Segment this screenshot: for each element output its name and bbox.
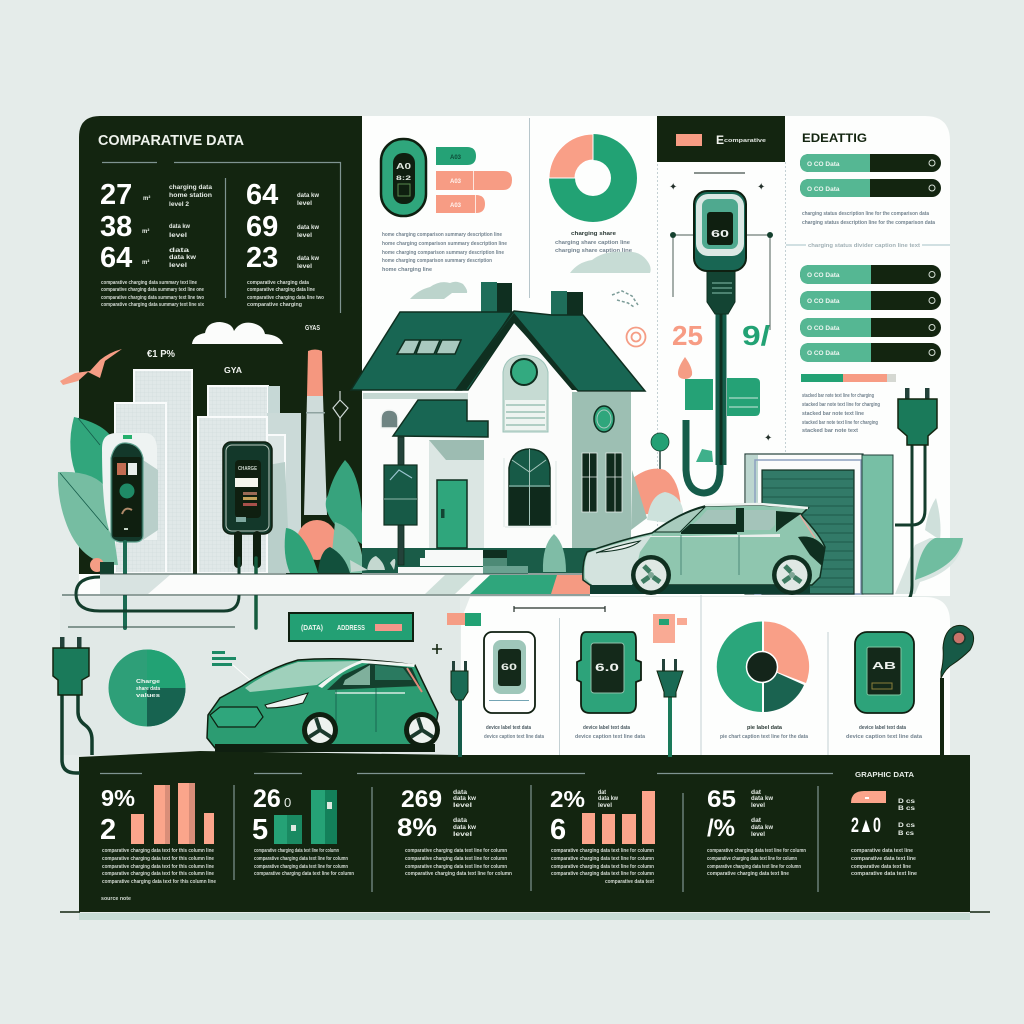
- illustration: salmon bush behind car: [631, 469, 683, 530]
- column 6: graphic stats: comparative data text line: [851, 871, 917, 877]
- stat column: right: data kw: [297, 256, 319, 262]
- text block: stacked bar notes: stacked bar note text line for charging: [802, 402, 880, 408]
- house walls: [362, 322, 631, 548]
- column 5: stats: comparative charging data text line for column: [707, 848, 806, 854]
- icon: scattered dots: [612, 291, 638, 307]
- panel: editing status bars: [786, 133, 950, 434]
- column 1: stats and bars: comparative charging data text for this column line: [102, 856, 214, 862]
- heading: status bars: EDEATTIG: [802, 133, 867, 145]
- cloud: above house: [410, 282, 467, 299]
- column 3: stats: data kw: [453, 825, 476, 831]
- column 1: stats and bars: comparative charging data text for this column line: [102, 879, 216, 885]
- stat column: left: data kw: [169, 224, 190, 230]
- column 2: stats and bars: [252, 785, 354, 877]
- text block: pill description: charging status description line for the comparison data: [802, 220, 935, 226]
- column 4: stats and bars: level: [598, 803, 612, 809]
- icon: salmon target: [626, 328, 646, 346]
- bar chart: green blocks: [274, 790, 337, 844]
- stat column: left: comparative charging data summary text line: [101, 280, 197, 286]
- wall lamp: [381, 410, 398, 428]
- labels above skyline: GYA: [224, 366, 242, 375]
- porch post: [398, 437, 404, 565]
- car: green hatchback: [207, 659, 440, 752]
- plug and cable: between cards: [657, 659, 683, 757]
- column 6: graphic stats: comparative data text line: [851, 848, 913, 854]
- donut chart: [549, 134, 637, 222]
- plug and cable: right: [828, 388, 937, 612]
- column 4: stats and bars: comparative data text: [605, 879, 654, 885]
- illustration: leaves left: [58, 417, 118, 574]
- column 1: stats and bars: source note: [101, 896, 131, 902]
- decorative stars: ✦: [669, 182, 677, 193]
- column 5: stats: [707, 786, 806, 877]
- text block: card 3: [846, 725, 922, 740]
- pill bar group bottom: O CO Data: [807, 350, 840, 357]
- bar chart: salmon 1: [131, 783, 214, 844]
- column 6: graphic stats: [851, 772, 917, 877]
- text block: description: home charging comparison summary description: [382, 258, 492, 264]
- icon: diamond pin: [333, 391, 348, 441]
- column 6: graphic stats: B cs: [898, 831, 915, 837]
- column 4: stats and bars: [550, 786, 655, 885]
- text block: card 2: device caption text line data: [575, 734, 645, 740]
- pill bar group top: O CO Data: [807, 161, 840, 168]
- column 5: stats: comparative charging data text line: [707, 871, 789, 877]
- stat column: left: level 2: [169, 202, 190, 208]
- infographic: charger plug with cable: [670, 173, 773, 493]
- text block: description: home charging comparison summary description line: [382, 241, 507, 247]
- text block: donut caption: charging share caption line: [555, 240, 630, 246]
- illustration: salmon bat: [60, 349, 122, 385]
- bars: green and salmon tabs: [436, 147, 512, 213]
- house base and planting: [362, 548, 602, 573]
- car body: [583, 505, 825, 585]
- column 3: stats: 269: [401, 786, 442, 813]
- column 3: stats: level: [453, 803, 472, 809]
- cables: chargers to ground loop: [76, 535, 257, 628]
- pill bar group top: [800, 154, 941, 197]
- panel: header tab: [657, 116, 785, 162]
- column 6: graphic stats: comparative data text line: [851, 856, 916, 862]
- column 4: stats and bars: comparative charging data text line for column: [551, 856, 654, 862]
- stat column: left: home station: [169, 193, 212, 199]
- text block: card 3: device label text data: [859, 725, 906, 731]
- garage door: [762, 470, 854, 594]
- column 5: stats: level: [751, 803, 765, 809]
- column 6: graphic stats: D cs: [898, 823, 916, 829]
- column 4: stats and bars: comparative charging data text line for column: [551, 864, 654, 870]
- device icon: key fob: 8:2: [396, 176, 412, 182]
- plug and cables: lower left: [53, 637, 92, 773]
- stat column: left: 64: [100, 242, 132, 274]
- column 1: stats and bars: comparative charging data text for this column line: [102, 864, 214, 870]
- pie chart: lower left: share data: [136, 686, 160, 692]
- labels above skyline: GYAS: [305, 325, 320, 332]
- stat column: right: data kw: [297, 193, 319, 199]
- panel: donut chart section: [381, 118, 651, 346]
- column 2: stats and bars: comparative charging data text line for column: [254, 856, 348, 862]
- roof windows: [397, 340, 461, 354]
- device card 2: [577, 632, 641, 713]
- stat column: right: 69: [246, 211, 278, 243]
- text block: card 1: [484, 725, 544, 740]
- column 3: stats: comparative charging data text line for column: [405, 848, 507, 854]
- cards: green label tiles: [685, 378, 760, 416]
- stat column: left: m²: [142, 228, 149, 235]
- text block: description: home charging comparison summary description line: [382, 232, 502, 238]
- bars: green and salmon tabs: A03: [450, 179, 462, 185]
- column 1: stats and bars: comparative charging data text for this column line: [102, 848, 214, 854]
- stat column: left: level: [169, 263, 187, 269]
- garage: [745, 454, 893, 594]
- text block: pill description: charging status description line for the comparison data: [802, 211, 929, 217]
- device card 2: 6.0: [595, 662, 619, 674]
- column 2: stats and bars: comparative charging data text line for column: [254, 848, 339, 854]
- column 1: stats and bars: 2: [100, 814, 116, 846]
- column 2: stats and bars: 0: [284, 795, 291, 810]
- column 4: stats and bars: dat: [598, 790, 606, 796]
- illustration: city buildings: [115, 370, 301, 573]
- labels above skyline: €1 P%: [147, 349, 175, 360]
- pie chart: lower left: values: [136, 693, 160, 699]
- text block: pie caption: [720, 725, 808, 740]
- gable medallion window: [503, 355, 548, 432]
- stat column: left: comparative charging data summary text line six: [101, 302, 204, 308]
- text block: description: [382, 232, 507, 273]
- decorative stars: ✦: [757, 182, 765, 193]
- text block: description: home charging line: [382, 267, 432, 273]
- text block: card 3: device caption text line data: [846, 734, 922, 740]
- steps: [398, 550, 528, 574]
- column 6: graphic stats: 2▲0: [851, 814, 881, 837]
- illustration: leaves and plants right of skyline: [285, 460, 362, 573]
- text block: card 2: device label text data: [583, 725, 630, 731]
- cloud: under donut: [570, 252, 651, 273]
- pie chart: lower left: [108, 650, 186, 726]
- pill bar group top: O CO Data: [807, 186, 840, 193]
- front door: [437, 480, 467, 548]
- cloud: white over dark panel: [192, 322, 283, 344]
- stat column: left: level: [169, 233, 187, 239]
- charger: wall unit left: [102, 433, 158, 542]
- icon: plus sign: [432, 644, 442, 654]
- stat column: left: 27: [100, 179, 132, 211]
- stat column: left: m²: [142, 259, 149, 266]
- charger: wall unit right: [223, 442, 272, 534]
- column 5: stats: data kw: [751, 825, 773, 831]
- column 5: stats: level: [751, 832, 765, 838]
- column 3: stats: data: [453, 790, 468, 796]
- decorative stars: [669, 182, 772, 444]
- panel: header tab: comparative: [724, 138, 766, 144]
- text block: donut caption: charging share: [571, 231, 616, 237]
- column 5: stats: dat: [751, 818, 761, 824]
- column 5: stats: 65: [707, 786, 736, 813]
- pill bar group bottom: O CO Data: [807, 298, 840, 305]
- text block: card 1: device label text data: [486, 725, 531, 731]
- chimneys: [481, 282, 583, 332]
- stat column: right: [246, 179, 324, 308]
- bottom panel: [60, 751, 990, 920]
- device card 1: 60: [501, 662, 517, 672]
- text block: card 2: [575, 725, 645, 740]
- infographic: charger plug with cable: 60: [711, 229, 730, 240]
- column 2: stats and bars: comparative charging data text line for column: [254, 864, 348, 870]
- dashed dividers: [658, 160, 786, 594]
- device card 3: AB: [872, 661, 896, 672]
- pie chart: lower left: Charge: [136, 679, 160, 685]
- earbud connector: right edge: [941, 625, 974, 755]
- panel: comparative data: [79, 116, 362, 574]
- cable loop: [686, 300, 720, 493]
- stat column: left: m²: [143, 195, 150, 202]
- text block: stacked bar notes: stacked bar note text line for charging: [802, 393, 874, 399]
- car: mint hatchback: [583, 504, 825, 595]
- column 1: stats and bars: comparative charging data text for this column line: [102, 871, 214, 877]
- text block: pie caption: pie label data: [747, 725, 782, 731]
- column 6: graphic stats: D cs: [898, 799, 916, 805]
- oval window: [594, 406, 614, 432]
- pill bar group bottom: [800, 265, 941, 362]
- panel: lower white comparison cards: [461, 595, 950, 755]
- stat column: right: data kw: [297, 225, 319, 231]
- figure: green number: 9/: [742, 320, 770, 351]
- stat column: right: level: [297, 201, 312, 207]
- icon: small green house mark: [696, 449, 713, 462]
- plaque: green label: (DATA): [301, 623, 323, 632]
- stat column: left: [100, 179, 213, 308]
- charger head: [694, 191, 746, 271]
- pie chart with center hole: [717, 621, 809, 712]
- column 6: graphic stats: GRAPHIC DATA: [855, 772, 914, 779]
- stat column: right: comparative charging data line two: [247, 295, 324, 301]
- porch roof: [393, 400, 488, 437]
- text block: pill description: [802, 211, 935, 226]
- stat column: right: 23: [246, 242, 278, 274]
- column 6: graphic stats: B cs: [898, 806, 916, 812]
- stacked bar: [801, 374, 896, 382]
- labels above skyline: [147, 325, 320, 375]
- stat column: left: data kw: [169, 255, 196, 261]
- device icon: key fob: [381, 139, 426, 216]
- column 3: stats: comparative charging data text line for column: [405, 871, 512, 877]
- bars: green and salmon tabs: A03: [450, 155, 462, 161]
- house: [350, 282, 645, 574]
- column 2: stats and bars: 26: [253, 785, 281, 813]
- shrubs: [350, 534, 566, 572]
- main roof left: [351, 312, 512, 390]
- chip: salmon green tag at panel corner: [447, 613, 481, 626]
- panel: main white background: [79, 116, 950, 596]
- car body: [207, 659, 438, 748]
- column 2: stats and bars: comparative charging data text line for column: [254, 871, 354, 877]
- pill bar group bottom: O CO Data: [807, 325, 840, 332]
- pin: green ball with stem: [651, 433, 669, 520]
- panel: editing status bars: charging status divider caption line text: [808, 243, 920, 249]
- text block: donut caption: charging share caption line: [555, 248, 632, 254]
- text block: card 1: device caption text line data: [484, 734, 544, 740]
- figure: salmon number: 25: [672, 320, 703, 351]
- legend with leader line: [212, 651, 251, 681]
- stat column: right: level: [297, 233, 312, 239]
- stat column: left: comparative charging data summary text line two: [101, 295, 204, 301]
- device card 3: [855, 632, 914, 713]
- pill bar group bottom: O CO Data: [807, 272, 840, 279]
- column 1: stats and bars: [100, 783, 216, 902]
- bar chart: salmon 2: [582, 791, 655, 844]
- text block: description: home charging comparison summary description line: [382, 250, 504, 256]
- stat column: right: level: [297, 264, 312, 270]
- heading: comparative data: COMPARATIVE DATA: [98, 133, 245, 149]
- column 2: stats and bars: 5: [252, 814, 268, 846]
- plug and cable: small center: [451, 661, 468, 757]
- chip: salmon and green tag: [653, 614, 687, 643]
- column 3: stats: comparative charging data text line for column: [405, 856, 507, 862]
- icon: salmon drop: [678, 357, 692, 379]
- column 1: stats and bars: 9%: [101, 785, 135, 811]
- tall windows: [582, 453, 622, 512]
- column 4: stats and bars: comparative charging data text line for column: [551, 848, 654, 854]
- column 5: stats: comparative charging data text line for column: [707, 856, 797, 862]
- column 4: stats and bars: data kw: [598, 796, 618, 802]
- column 5: stats: comparative charging data text line for column: [707, 864, 801, 870]
- column 4: stats and bars: 6: [550, 814, 566, 846]
- column 3: stats: level: [453, 832, 472, 838]
- panel: header tab: E: [716, 133, 724, 147]
- gable roof right: [456, 311, 645, 391]
- stat column: left: comparative charging data summary text line one: [101, 287, 204, 293]
- stat column: right: comparative charging: [247, 302, 302, 308]
- text block: stacked bar notes: stacked bar note text: [802, 428, 858, 434]
- stat column: left: data: [169, 248, 190, 254]
- column 3: stats: data: [453, 818, 468, 824]
- bars: green and salmon tabs: A03: [450, 203, 462, 209]
- plaque: green label: [289, 613, 413, 641]
- device icon: key fob: A0: [396, 162, 412, 171]
- column 4: stats and bars: 2%: [550, 786, 585, 812]
- column 3: stats: [397, 786, 512, 877]
- column 3: stats: comparative charging data text line for column: [405, 864, 507, 870]
- text block: donut caption: [555, 231, 632, 254]
- plug body: [707, 270, 735, 314]
- decorative stars: ✦: [764, 433, 772, 444]
- rules and dividers: [100, 774, 833, 892]
- stat column: right: 64: [246, 179, 278, 211]
- column 4: stats and bars: comparative charging data text line for column: [551, 871, 654, 877]
- column 6: graphic stats: comparative data text line: [851, 864, 911, 870]
- plaque: green label: ADDRESS: [337, 623, 365, 632]
- stat column: left: charging data: [169, 185, 213, 191]
- stat column: left: 38: [100, 211, 132, 243]
- text block: stacked bar notes: stacked bar note text line: [802, 411, 864, 417]
- device card 1: [484, 632, 535, 713]
- column 3: stats: 8%: [397, 814, 437, 842]
- arched window: [504, 449, 556, 527]
- illustration: pale leaf right: [895, 498, 963, 594]
- text block: pie caption: pie chart caption text line for the data: [720, 734, 808, 740]
- column 5: stats: dat: [751, 790, 761, 796]
- text block: stacked bar notes: stacked bar note text line for charging: [802, 420, 878, 426]
- illustration: chimney tower: [304, 350, 327, 515]
- stat column: right: comparative charging data line: [247, 287, 315, 293]
- left window: [384, 465, 417, 525]
- ground path: [62, 574, 606, 627]
- text block: stacked bar notes: [802, 393, 880, 434]
- column 5: stats: /%: [707, 815, 735, 842]
- charger: wall unit right: CHARGE: [238, 466, 258, 472]
- column 3: stats: data kw: [453, 796, 476, 802]
- stat column: right: comparative charging data: [247, 280, 309, 286]
- column 5: stats: data kw: [751, 796, 773, 802]
